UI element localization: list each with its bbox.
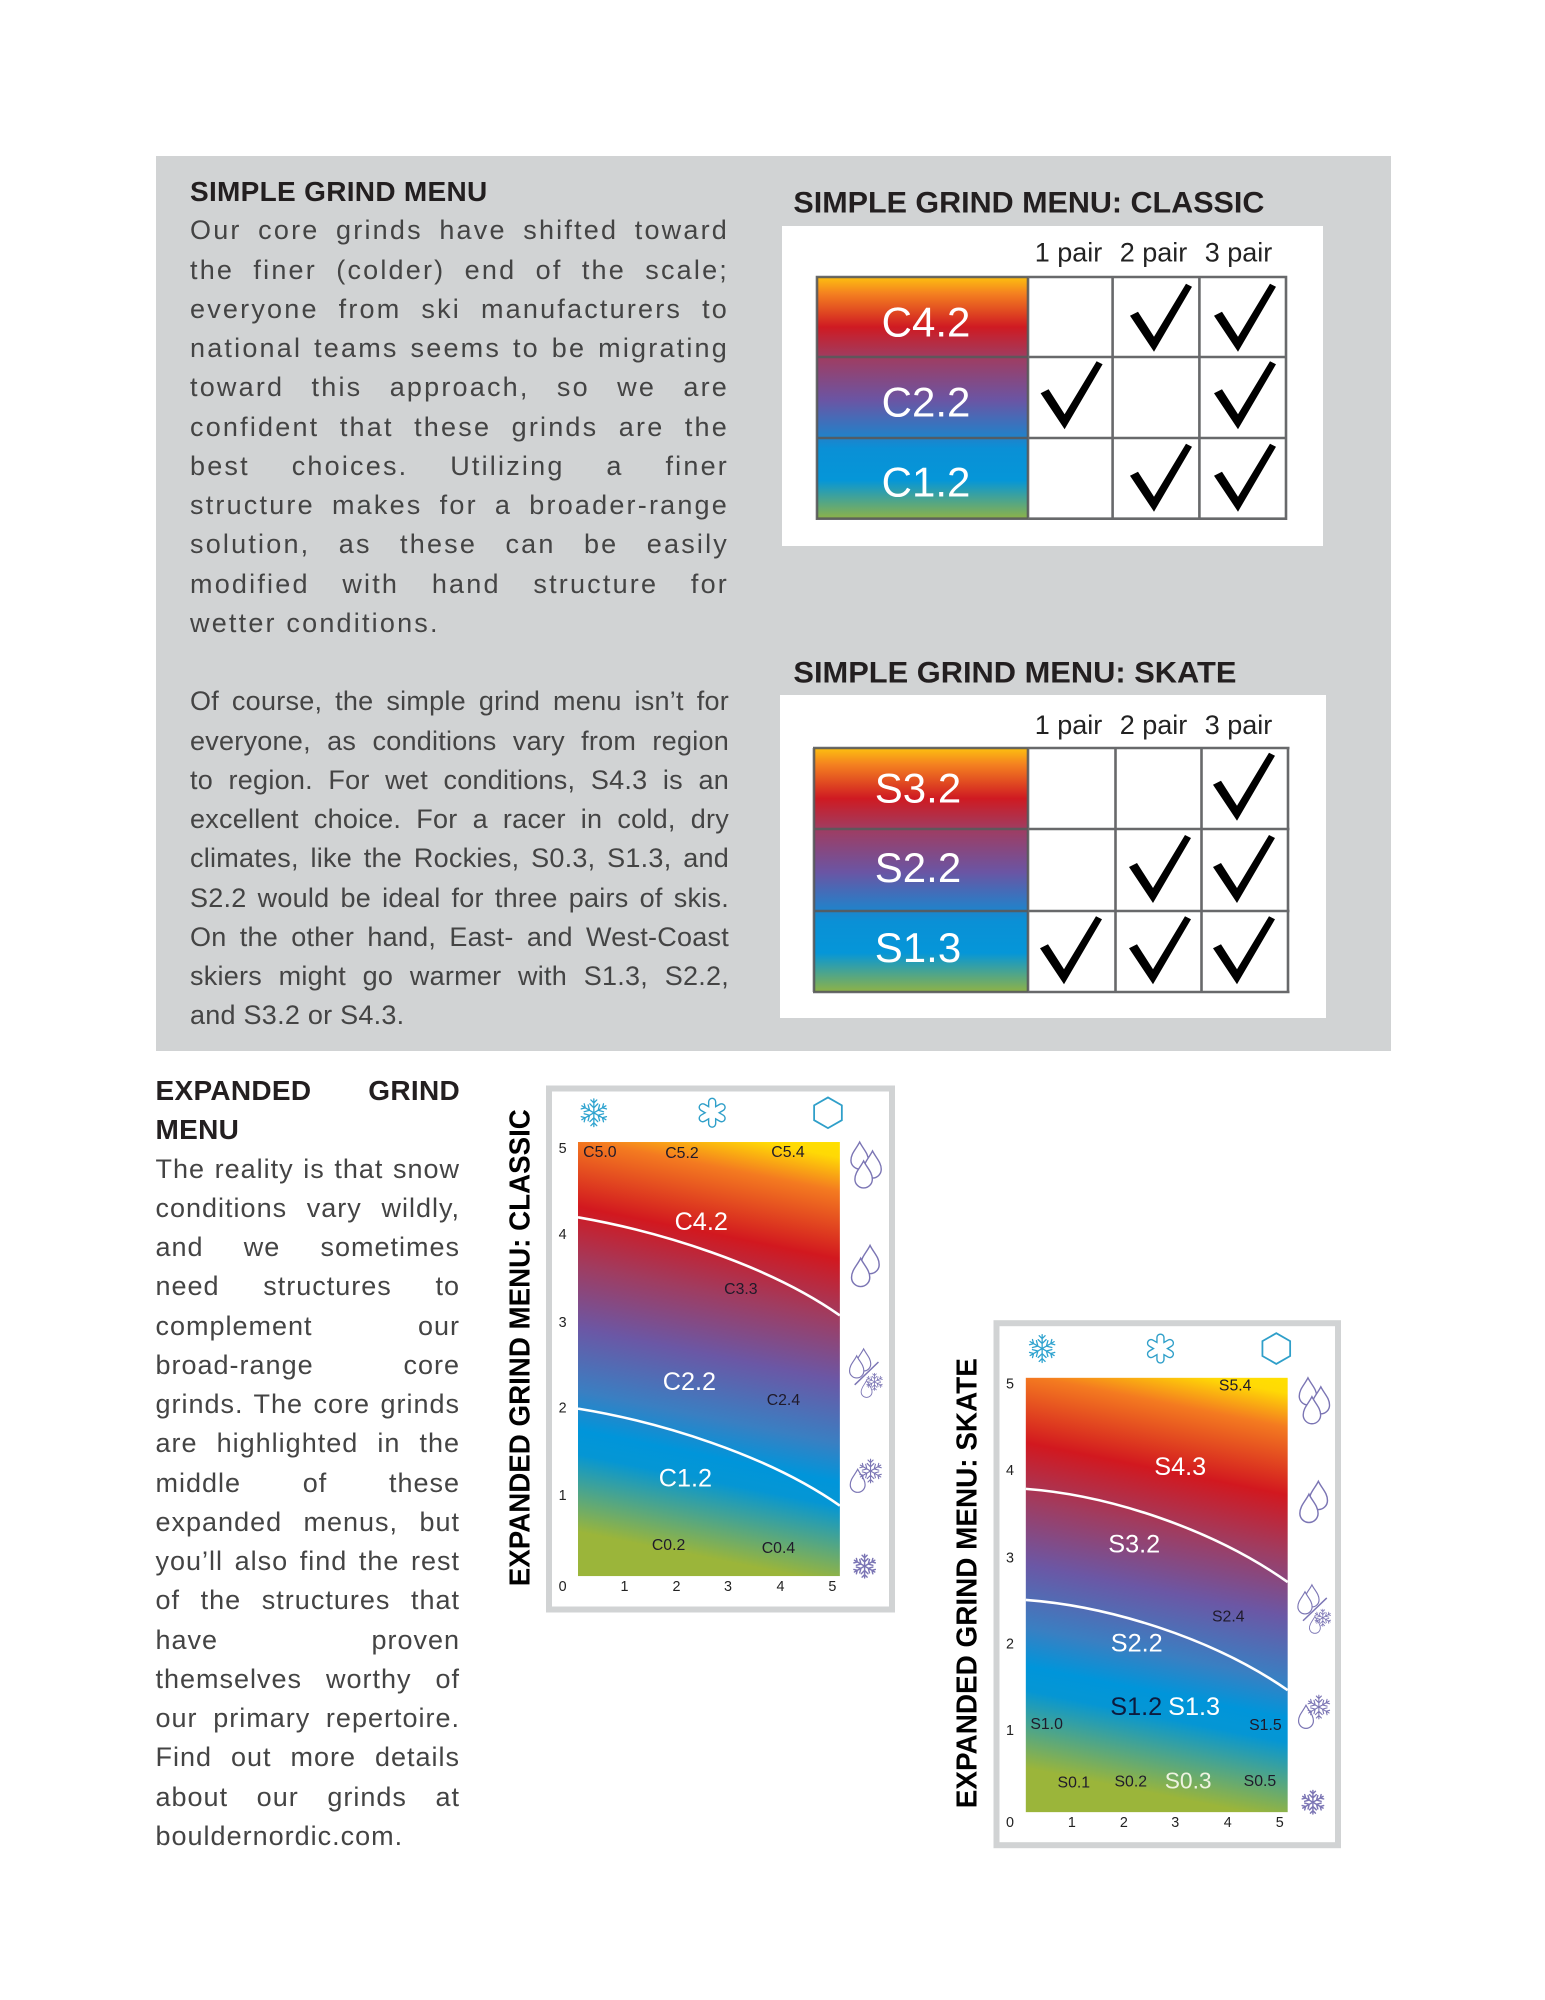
gradient row labels	[817, 277, 1028, 519]
paragraph: expanded menu: bouldernordic.com.	[156, 1821, 403, 1851]
row labels: C2.2	[882, 378, 970, 426]
moisture icons	[850, 1142, 883, 1578]
plot contents	[1006, 1333, 1331, 1831]
text block: simple grind menu description	[190, 176, 729, 1030]
paragraph: expanded menu: grinds. The core grinds	[156, 1389, 460, 1419]
axis labels: 0	[559, 1579, 567, 1595]
paragraph: regional conditions: and S3.2 or S4.3.	[190, 1000, 404, 1030]
grind labels: S3.2	[1108, 1530, 1160, 1558]
paragraph: expanded menu: middle of these	[156, 1468, 460, 1498]
axis labels: 4	[559, 1227, 567, 1243]
column headers: 3 pair	[1205, 710, 1272, 740]
paragraph: expanded menu: conditions vary wildly,	[156, 1193, 460, 1223]
row labels: C1.2	[882, 458, 970, 505]
grind labels: S0.3	[1165, 1767, 1212, 1793]
paragraph: expanded menu: The reality is that snow	[156, 1154, 460, 1184]
grind labels: C4.2	[675, 1208, 728, 1236]
paragraph: regional conditions: climates, like the Rockies, S0.3, S1.3, and	[190, 843, 729, 873]
paragraph: regional conditions: everyone, as conditions vary from region	[190, 726, 729, 756]
row labels	[882, 298, 970, 505]
grind labels: S0.1	[1058, 1774, 1090, 1791]
paragraph: core grinds: Our core grinds have shifted toward	[190, 215, 729, 245]
paragraph: expanded menu	[156, 1154, 460, 1851]
axis labels: 5	[1276, 1815, 1284, 1831]
axis labels: 5	[828, 1579, 836, 1595]
plot contents	[559, 1097, 883, 1595]
axis labels: 1	[621, 1579, 629, 1595]
column headers: 2 pair	[1120, 238, 1187, 268]
text block: expanded grind menu description	[156, 1075, 460, 1851]
paragraph: expanded menu: and we sometimes	[156, 1232, 460, 1262]
paragraph: expanded menu: expanded menus, but	[156, 1507, 460, 1537]
vertical title: EXPANDED GRIND MENU: CLASSIC	[504, 1109, 536, 1586]
column headers: 1 pair	[1035, 238, 1102, 268]
grind labels: S2.4	[1212, 1609, 1245, 1626]
axis labels: 2	[673, 1579, 681, 1595]
gradient plot	[1026, 1378, 1288, 1812]
axis labels: 2	[559, 1401, 567, 1417]
paragraph: regional conditions: Of course, the simple grind menu isn’t for	[190, 686, 729, 716]
grid	[817, 277, 1286, 519]
axis labels: 3	[1171, 1815, 1179, 1831]
paragraph: regional conditions: excellent choice. For a racer in cold, dry	[190, 804, 729, 834]
paragraph: expanded menu: have proven	[156, 1624, 460, 1654]
check marks	[1040, 753, 1275, 984]
axis labels: 1	[1068, 1815, 1076, 1831]
grind labels: S0.2	[1114, 1773, 1147, 1790]
grind labels: S1.2	[1110, 1693, 1162, 1721]
frame	[549, 1088, 892, 1610]
paragraph: core grinds: wetter conditions.	[190, 608, 440, 638]
snow icons	[580, 1097, 842, 1128]
paragraph: core grinds: best choices. Utilizing a finer	[190, 451, 729, 481]
frame	[996, 1323, 1338, 1845]
grind labels: C5.2	[665, 1145, 699, 1162]
column headers	[1035, 238, 1272, 268]
heading: simple grind menu: SIMPLE GRIND MENU	[190, 176, 488, 207]
row labels: S1.3	[875, 924, 961, 971]
paragraph: expanded menu: Find out more details	[156, 1742, 460, 1772]
row labels: C4.2	[882, 298, 970, 345]
paragraph: expanded menu: about our grinds at	[156, 1782, 460, 1812]
axis labels: 2	[1006, 1637, 1014, 1653]
paragraph: expanded menu: complement our	[156, 1310, 460, 1340]
paragraph: expanded menu: of the structures that	[156, 1585, 460, 1615]
column headers: 2 pair	[1120, 710, 1187, 740]
boundary curves	[1026, 1489, 1288, 1690]
chart: expanded grind menu classic	[504, 1086, 895, 1612]
axis labels: 3	[1006, 1551, 1014, 1567]
paragraph: core grinds: solution, as these can be easily	[190, 529, 729, 559]
paragraph: core grinds	[190, 215, 729, 638]
paragraph: core grinds: national teams seems to be migrating	[190, 333, 729, 363]
grid	[813, 748, 1290, 992]
gradient plot	[578, 1142, 840, 1576]
row labels: S3.2	[875, 764, 961, 811]
grind labels: S0.5	[1244, 1773, 1276, 1790]
axis labels: 1	[559, 1488, 567, 1504]
heading: simple classic: SIMPLE GRIND MENU: CLASSIC	[793, 186, 1264, 219]
row labels	[875, 764, 961, 971]
panel: simple grind menu background	[156, 156, 1391, 1051]
column headers: 3 pair	[1205, 238, 1272, 268]
gradient row labels	[814, 748, 1028, 992]
paragraph: expanded menu: our primary repertoire.	[156, 1703, 460, 1733]
grind labels: C2.2	[663, 1368, 716, 1396]
moisture icons	[1298, 1378, 1331, 1814]
paragraph: core grinds: structure makes for a broader-range	[190, 490, 729, 520]
white card	[780, 695, 1326, 1018]
paragraph: expanded menu: themselves worthy of	[156, 1664, 460, 1694]
grind labels: S1.0	[1030, 1716, 1063, 1733]
paragraph: regional conditions: skiers might go warmer with S1.3, S2.2,	[190, 961, 729, 991]
grind labels: S2.2	[1111, 1629, 1163, 1658]
boundary curves	[578, 1217, 840, 1506]
heading: expanded grind menu	[156, 1075, 460, 1145]
vertical title: EXPANDED GRIND MENU: SKATE	[952, 1358, 984, 1808]
check marks	[1041, 284, 1276, 512]
paragraph: core grinds: toward this approach, so we are	[190, 372, 729, 402]
row labels: S2.2	[875, 844, 961, 891]
paragraph: core grinds: confident that these grinds are the	[190, 412, 729, 442]
axis labels: 4	[776, 1579, 784, 1595]
grind labels: S5.4	[1219, 1378, 1252, 1395]
paragraph: core grinds: everyone from ski manufacturers to	[190, 294, 729, 324]
axis labels: 3	[724, 1579, 732, 1595]
paragraph: regional conditions: to region. For wet conditions, S4.3 is an	[190, 765, 729, 795]
axis labels: 0	[1006, 1815, 1014, 1831]
axis labels: 2	[1120, 1815, 1128, 1831]
grind labels: S1.3	[1168, 1693, 1220, 1721]
paragraph: regional conditions: On the other hand, East- and West-Coast	[190, 922, 729, 952]
axis labels: 1	[1006, 1723, 1014, 1739]
axis labels: 4	[1006, 1463, 1014, 1479]
table panel: simple grind menu skate	[780, 657, 1326, 1018]
grind labels	[583, 1144, 805, 1557]
grind labels: C2.4	[767, 1392, 800, 1409]
grind labels: S1.5	[1249, 1717, 1282, 1734]
paragraph: expanded menu: need structures to	[156, 1271, 460, 1301]
grind labels: C3.3	[724, 1281, 758, 1298]
snow icons	[1028, 1333, 1290, 1364]
paragraph: regional conditions: S2.2 would be ideal for three pairs of skis.	[190, 883, 729, 913]
paragraph: core grinds: the finer (colder) end of the scale;	[190, 255, 729, 285]
paragraph: expanded menu: broad-range core	[156, 1350, 460, 1380]
grind labels: C0.2	[652, 1537, 685, 1554]
axis labels: 4	[1224, 1815, 1232, 1831]
heading: simple skate: SIMPLE GRIND MENU: SKATE	[793, 657, 1236, 690]
paragraph: expanded menu: you’ll also find the rest	[156, 1546, 460, 1576]
axis labels	[1006, 1377, 1284, 1831]
grind labels: C1.2	[659, 1464, 712, 1492]
paragraph: regional conditions	[190, 686, 729, 1030]
table panel: simple grind menu classic	[782, 186, 1323, 546]
column headers	[1035, 710, 1272, 740]
grind labels: C0.4	[762, 1540, 795, 1557]
white card	[782, 226, 1323, 546]
column headers: 1 pair	[1035, 710, 1102, 740]
grind labels: S4.3	[1154, 1453, 1206, 1481]
chart: expanded grind menu skate	[952, 1320, 1341, 1848]
axis labels: 5	[559, 1141, 567, 1157]
heading: expanded grind menu: EXPANDED GRIND	[156, 1075, 460, 1106]
grind labels: C5.0	[583, 1144, 617, 1161]
paragraph: expanded menu: are highlighted in the	[156, 1428, 460, 1458]
axis labels: 3	[559, 1315, 567, 1331]
paragraph: core grinds: modified with hand structure for	[190, 569, 729, 599]
axis labels	[559, 1141, 836, 1595]
axis labels: 5	[1006, 1377, 1014, 1393]
grind labels	[1030, 1378, 1282, 1793]
grind labels: C5.4	[771, 1144, 805, 1161]
heading: expanded grind menu: MENU	[156, 1114, 239, 1145]
